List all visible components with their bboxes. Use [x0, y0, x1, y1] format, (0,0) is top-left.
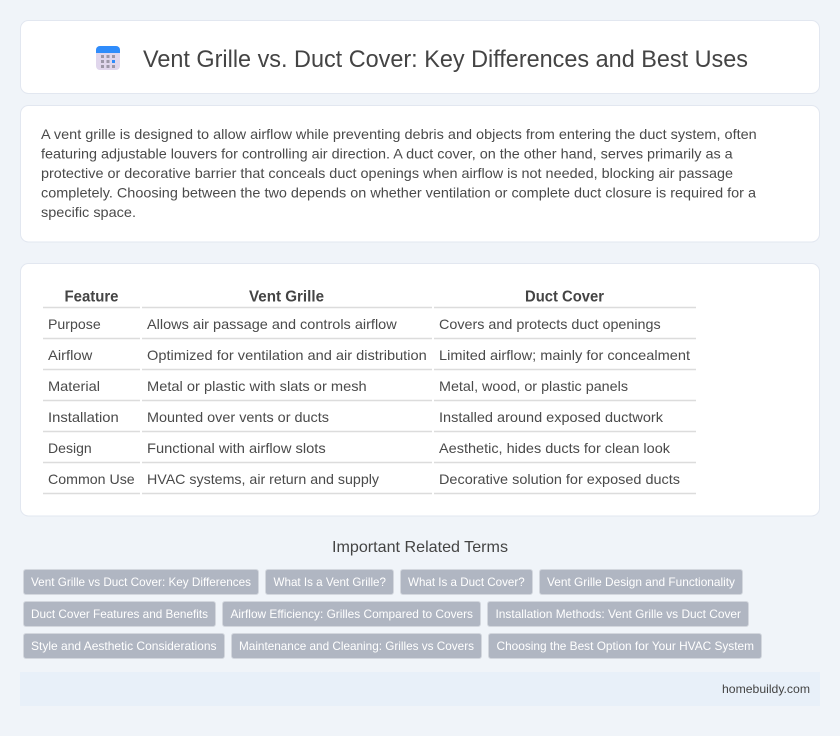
intro paragraph: specific space.: [41, 204, 136, 220]
row: airflow: Limited airflow; mainly for concealment: [439, 347, 690, 363]
tag row 1: What Is a Duct Cover?: [408, 575, 525, 589]
row: airflow: Airflow: [48, 347, 93, 363]
row: material: Material: [48, 378, 100, 394]
row: installation: Mounted over vents or ducts: [147, 409, 329, 425]
tag row 3: [24, 634, 762, 658]
row: design: Design: [48, 440, 92, 456]
tag row 1: Vent Grille vs Duct Cover: Key Differences: [31, 575, 251, 589]
row: installation: Installation: [48, 409, 119, 425]
row: installation: Installed around exposed ductwork: [439, 409, 664, 425]
row: design: Aesthetic, hides ducts for clean look: [439, 440, 671, 456]
row: purpose: Purpose: [48, 316, 101, 332]
tag row 1: [24, 570, 742, 594]
tag row 2: Installation Methods: Vent Grille vs Duct Cover: [496, 607, 741, 621]
title: Vent Grille vs. Duct Cover: Key Differences and Best Uses: [143, 46, 748, 73]
tag row 3: Style and Aesthetic Considerations: [31, 639, 216, 653]
row: airflow: Optimized for ventilation and air distribution: [147, 347, 427, 363]
row: common use: [48, 471, 680, 487]
footer: homebuildy.com: [722, 682, 810, 696]
tag row 2: [24, 602, 748, 626]
tag row 1: Vent Grille Design and Functionality: [547, 575, 735, 589]
related term tags: [24, 570, 762, 658]
intro paragraph: [41, 126, 757, 220]
tag row 3: Maintenance and Cleaning: Grilles vs Covers: [239, 639, 474, 653]
intro paragraph: A vent grille is designed to allow airflow while preventing debris and objects from entering the duct system, often: [41, 126, 757, 142]
table header: Duct Cover: [525, 289, 604, 306]
row: installation: [48, 409, 664, 425]
row: common use: HVAC systems, air return and supply: [147, 471, 379, 487]
panel: comparison table: [20, 264, 820, 516]
row: airflow: [48, 347, 690, 363]
row: design: [48, 440, 671, 456]
row: purpose: Allows air passage and controls airflow: [147, 316, 398, 332]
table header: [64, 289, 604, 306]
row: material: Metal, wood, or plastic panels: [439, 378, 628, 394]
header panel: [20, 20, 820, 94]
tag row 3: Choosing the Best Option for Your HVAC System: [496, 639, 754, 653]
icon: calendar: [96, 46, 120, 70]
table header: Feature: [64, 289, 119, 306]
intro paragraph: completely. Choosing between the two depends on whether ventilation or complete duct closure is required for a: [41, 184, 756, 200]
row: design: Functional with airflow slots: [147, 440, 326, 456]
row: purpose: Covers and protects duct openings: [439, 316, 661, 332]
tag row 2: Duct Cover Features and Benefits: [31, 607, 208, 621]
intro paragraph: protective or decorative barrier that conceals duct openings when airflow is not needed, blocking air passage: [41, 165, 733, 181]
heading: important related terms: Important Related Terms: [332, 539, 508, 556]
row: material: Metal or plastic with slats or mesh: [147, 378, 367, 394]
table header: Vent Grille: [249, 289, 324, 306]
row: purpose: [48, 316, 661, 332]
panel: introduction: [20, 106, 820, 242]
row: common use: Decorative solution for exposed ducts: [439, 471, 680, 487]
intro paragraph: featuring adjustable louvers for controlling air direction. A duct cover, on the other hand, serves primarily as a: [41, 146, 733, 162]
row: material: [48, 378, 628, 394]
tag row 1: What Is a Vent Grille?: [274, 575, 386, 589]
footer: [20, 672, 820, 706]
row: common use: Common Use: [48, 471, 135, 487]
tag row 2: Airflow Efficiency: Grilles Compared to Covers: [230, 607, 473, 621]
